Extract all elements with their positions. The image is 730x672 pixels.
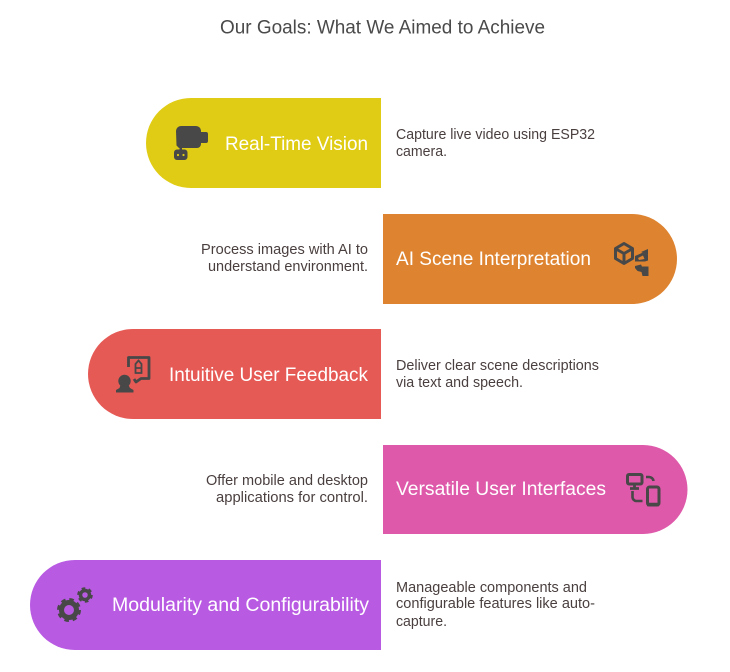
description [396,358,599,391]
pink pill [383,445,688,534]
description: Deliver clear scene descriptions [396,358,599,374]
icon: camera with robot [174,126,208,160]
description: Manageable components and [396,580,587,596]
description [396,127,595,160]
panel: Modularity and Configurability [30,560,595,650]
panel: AI Scene Interpretation [201,214,677,304]
panel: Real-Time Vision [146,98,595,188]
description: capture. [396,614,447,630]
icon: person with speech bubble [116,358,149,392]
description: configurable features like auto- [396,596,595,612]
heading: AI Scene Interpretation [396,249,591,270]
heading: Modularity and Configurability [112,595,370,616]
description [206,473,368,506]
description: Offer mobile and desktop [206,473,368,489]
heading: Real-Time Vision [225,134,368,155]
description: applications for control. [216,490,368,506]
orange pill [383,214,677,304]
description: Capture live video using ESP32 [396,127,595,143]
description: via text and speech. [396,375,523,391]
heading: Versatile User Interfaces [396,479,606,500]
description [396,580,595,630]
icon: cube and figure [616,244,648,276]
panel: Intuitive User Feedback [88,329,599,419]
purple pill [30,560,381,650]
description: Process images with AI to [201,242,368,258]
description: understand environment. [208,259,368,275]
description: camera. [396,144,447,160]
panel: Versatile User Interfaces [206,445,688,534]
yellow pill [146,98,381,188]
red pill [88,329,381,419]
icon: monitor and phone [628,474,659,505]
icon: gears [59,589,91,620]
description [201,242,368,275]
heading: Intuitive User Feedback [169,365,368,386]
title: Our Goals: What We Aimed to Achieve [220,18,545,38]
